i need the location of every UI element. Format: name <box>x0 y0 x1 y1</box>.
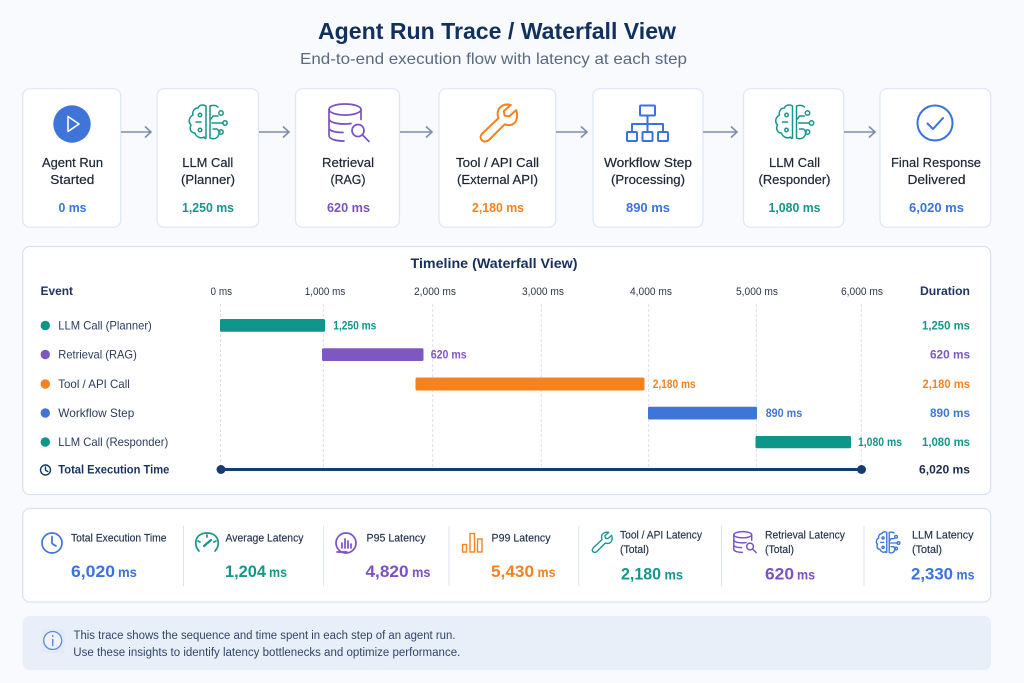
step: llm call planner <box>157 89 258 227</box>
icon: brain <box>189 105 227 139</box>
icon: database search <box>329 104 369 142</box>
icon: info <box>41 629 65 653</box>
step: final response: Final Response <box>891 155 981 170</box>
step: retrieval: (RAG) <box>330 172 366 187</box>
row: total execution time: 6,020 ms <box>919 462 970 476</box>
metric: total execution time: 6,020 <box>71 562 115 581</box>
panel: flow steps <box>23 89 991 227</box>
icon: wrench <box>481 104 517 141</box>
metric: p95 latency: P95 Latency <box>366 532 426 544</box>
step: agent run started: Agent Run <box>42 155 103 170</box>
metric: llm latency: (Total) <box>912 544 942 556</box>
step: final response: 6,020 ms <box>909 200 964 215</box>
metric: tool api latency: Tool / API Latency <box>620 530 702 542</box>
step: workflow step: Workflow Step <box>604 155 692 170</box>
step: llm call responder: LLM Call <box>769 155 820 170</box>
step: llm call planner: LLM Call <box>182 155 233 170</box>
time axis: 2,000 ms <box>414 286 456 298</box>
step: workflow step: (Processing) <box>611 172 685 187</box>
metric: retrieval latency: 620 <box>765 564 794 584</box>
step: llm call planner: 1,250 ms <box>182 200 234 215</box>
timeline heading: Timeline (Waterfall View) <box>410 256 578 271</box>
time axis: 3,000 ms <box>522 286 564 298</box>
row: retrieval <box>41 348 970 362</box>
row: workflow step: 890 ms <box>930 406 970 420</box>
icon: brain <box>776 105 814 139</box>
note text <box>73 630 460 659</box>
step: tool api call: Tool / API Call <box>456 155 539 170</box>
row: tool api call: 2,180 ms <box>922 377 970 391</box>
metric: p95 latency: 4,820 <box>366 562 408 581</box>
metric: p99 latency: P99 Latency <box>492 532 551 544</box>
icon: check circle <box>918 106 952 140</box>
panel: info note <box>22 616 991 670</box>
metric: tool api latency: ms <box>664 568 683 582</box>
step: retrieval: Retrieval <box>322 155 374 170</box>
panel: latency metrics <box>23 508 991 602</box>
time axis <box>211 286 883 467</box>
arrow <box>556 126 587 138</box>
row: llm call responder: 1,080 ms <box>858 437 902 449</box>
row: workflow step: Workflow Step <box>58 406 135 420</box>
step: llm call responder: 1,080 ms <box>768 200 820 215</box>
metric: llm latency: LLM Latency <box>912 530 974 542</box>
step: final response: Delivered <box>908 172 966 187</box>
step: retrieval: 620 ms <box>327 200 370 215</box>
arrow <box>259 126 289 138</box>
metric: average latency <box>196 532 304 581</box>
row: tool api call <box>41 377 970 391</box>
row: retrieval: 620 ms <box>930 348 970 362</box>
row: llm call responder: 1,080 ms <box>922 435 970 449</box>
time axis: 0 ms <box>211 286 232 298</box>
column header: event: Event <box>40 284 73 298</box>
arrow <box>400 126 432 138</box>
metric: average latency: ms <box>269 565 287 580</box>
icon: hierarchy <box>627 106 668 141</box>
step: agent run started: Started <box>50 172 94 187</box>
metric: tool api latency <box>592 530 702 584</box>
metric: retrieval latency <box>734 530 845 584</box>
time axis: 1,000 ms <box>305 286 346 298</box>
metric: tool api latency: 2,180 <box>621 564 661 584</box>
metric: total execution time: Total Execution Time <box>71 532 166 544</box>
panel: timeline waterfall <box>23 246 991 494</box>
note text: This trace shows the sequence and time spent in each step of an agent run. <box>74 630 456 642</box>
step: tool api call: 2,180 ms <box>472 200 524 215</box>
metric: tool api latency: (Total) <box>620 544 649 556</box>
row: llm call responder: LLM Call (Responder) <box>58 435 168 449</box>
metric: retrieval latency: (Total) <box>765 544 794 556</box>
time axis: 5,000 ms <box>736 286 778 298</box>
step: agent run started: 0 ms <box>58 200 86 215</box>
metric: total execution time: ms <box>118 565 137 580</box>
metric: p99 latency: 5,430 <box>491 562 534 581</box>
metric: p95 latency <box>336 532 430 581</box>
step: final response <box>880 89 991 227</box>
metric: average latency: Average Latency <box>226 532 304 544</box>
step: agent run started <box>23 89 121 227</box>
row: llm call planner: 1,250 ms <box>333 320 376 332</box>
step: workflow step: 890 ms <box>626 200 670 215</box>
row: retrieval: Retrieval (RAG) <box>58 348 137 362</box>
subtitle: End-to-end execution flow with latency at each step <box>300 51 687 68</box>
row: tool api call: 2,180 ms <box>653 379 696 391</box>
row: workflow step: 890 ms <box>766 408 802 420</box>
step: workflow step <box>593 89 703 227</box>
metric: retrieval latency: Retrieval Latency <box>765 530 845 542</box>
title: Agent Run Trace / Waterfall View <box>318 18 676 44</box>
step: llm call responder: (Responder) <box>758 172 830 187</box>
row: llm call planner: 1,250 ms <box>922 318 970 332</box>
metric: llm latency: 2,330 <box>911 564 953 584</box>
arrow <box>703 126 737 138</box>
row: retrieval: 620 ms <box>431 350 467 362</box>
icon: play <box>53 105 91 143</box>
metric: llm latency: ms <box>956 568 974 582</box>
arrow <box>844 126 875 138</box>
row: llm call responder <box>41 435 970 449</box>
metric: llm latency <box>876 530 974 584</box>
step: retrieval <box>296 89 400 227</box>
time axis: 6,000 ms <box>841 286 883 298</box>
time axis: 4,000 ms <box>630 286 672 298</box>
arrow <box>121 126 151 138</box>
metric: retrieval latency: ms <box>797 568 815 582</box>
metric: p99 latency <box>462 532 556 581</box>
row: total execution time: Total Execution Time <box>58 462 170 476</box>
metric: total execution time <box>42 532 166 581</box>
step: tool api call <box>439 89 556 227</box>
row: tool api call: Tool / API Call <box>58 377 130 391</box>
row: workflow step <box>41 406 970 420</box>
metric: average latency: 1,204 <box>225 562 267 581</box>
metric: p95 latency: ms <box>412 565 430 580</box>
step: llm call planner: (Planner) <box>181 172 235 187</box>
row: total execution time <box>40 462 970 476</box>
column header: duration: Duration <box>920 284 970 298</box>
note text: Use these insights to identify latency bottlenecks and optimize performance. <box>73 647 460 659</box>
row: llm call planner: LLM Call (Planner) <box>58 318 152 332</box>
step: llm call responder <box>744 89 844 227</box>
metric: p99 latency: ms <box>538 565 556 580</box>
step: tool api call: (External API) <box>457 172 538 187</box>
row: llm call planner <box>41 318 970 332</box>
